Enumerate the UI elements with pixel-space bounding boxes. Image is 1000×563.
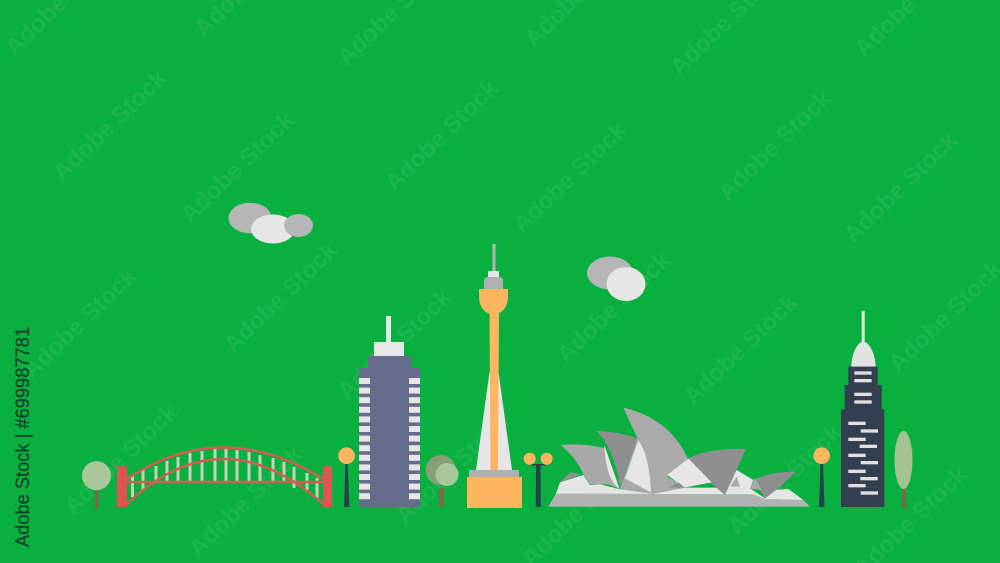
Sydney Tower (467, 244, 522, 508)
Sydney Opera House (548, 407, 810, 507)
watermark pattern: Adobe Stock (380, 74, 504, 196)
window strips (848, 371, 878, 495)
watermark pattern: Adobe Stock (59, 398, 183, 520)
tree: tall cypress (894, 431, 912, 509)
cloud: left (228, 203, 313, 244)
street lamp: double (524, 453, 553, 507)
watermark pattern: Adobe Stock (333, 283, 457, 405)
watermark pattern: Adobe Stock (184, 440, 308, 562)
harbour bridge (117, 448, 332, 507)
watermark pattern: Adobe Stock (839, 126, 963, 248)
watermark pattern: Adobe Stock (713, 84, 837, 206)
watermark pattern: Adobe Stock (723, 418, 847, 540)
side credit text: Adobe Stock | #699987781 (13, 327, 34, 547)
watermark pattern: Adobe Stock (219, 236, 343, 358)
watermark pattern: Adobe Stock (18, 262, 142, 384)
watermark pattern: Adobe Stock (48, 64, 172, 186)
street lamp: near bridge (338, 447, 355, 507)
watermark pattern: Adobe Stock (176, 106, 300, 228)
windows (359, 378, 420, 499)
watermark pattern: Adobe Stock (391, 407, 515, 529)
watermark pattern: Adobe Stock (552, 246, 676, 368)
street lamp: right (813, 447, 830, 507)
slate skyscraper with windows (359, 316, 420, 507)
watermark pattern: Adobe Stock (679, 288, 803, 410)
tree: left round (82, 461, 111, 509)
watermark pattern: Adobe Stock (508, 116, 632, 238)
tree: double canopy (426, 455, 458, 507)
dark skyscraper with spire (841, 311, 884, 507)
cloud: right (587, 256, 646, 301)
